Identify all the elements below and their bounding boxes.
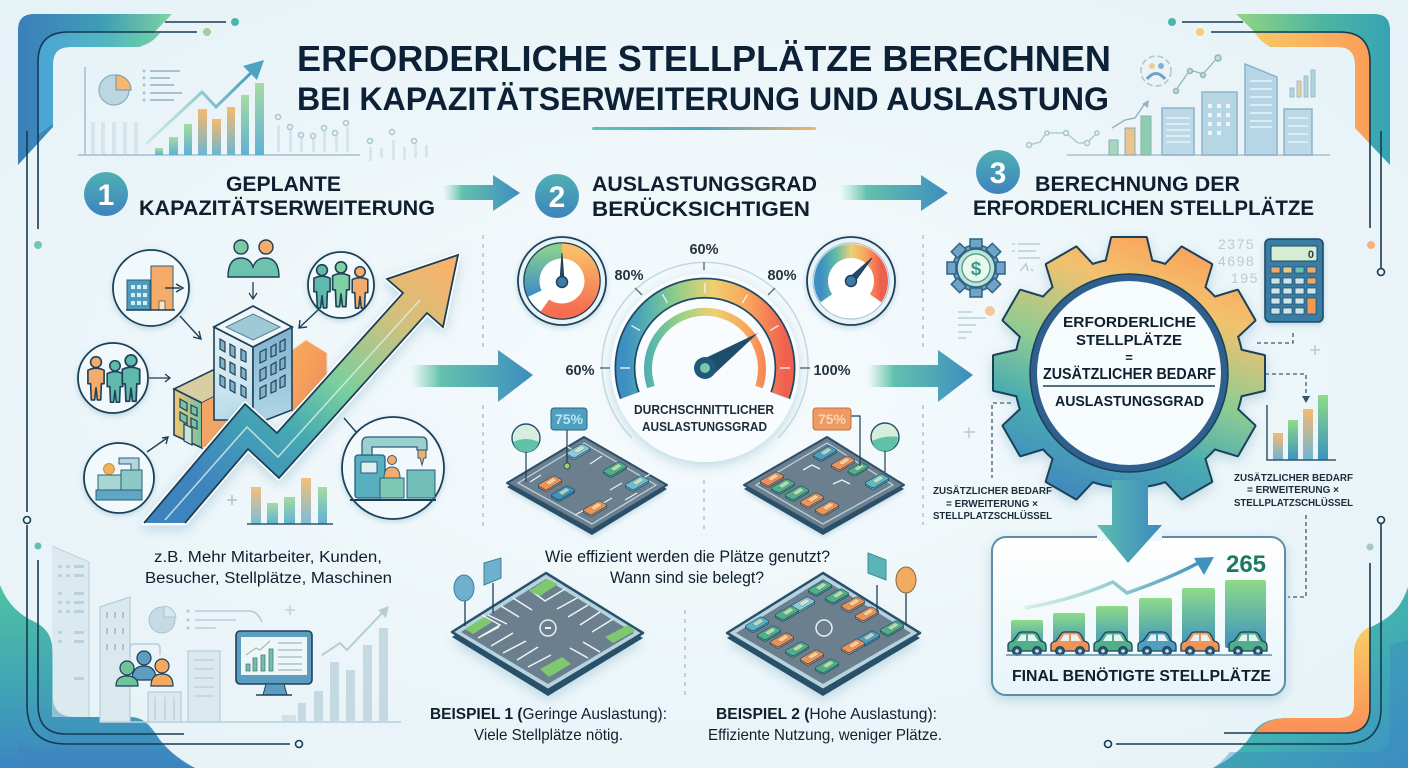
small gauge left [518,237,606,325]
bottom left illustration [52,546,401,722]
step 1 illustration [78,240,458,524]
result panel: FINAL BENÖTIGTE STELLPLÄTZE [1012,668,1271,685]
icon: cost gear: $ [971,259,982,280]
gauge caption: DURCHSCHNITTLICHER [634,403,774,417]
formula text: STELLPLÄTZE [1076,332,1182,349]
number badge 3: 3 [990,157,1006,190]
formula text: ZUSÄTZLICHER BEDARF [1043,366,1216,383]
small bar chart [227,478,333,524]
title [297,38,1111,130]
additional demand note: left: = ERWEITERUNG × [946,499,1038,510]
icon: machine with worker [342,417,444,519]
gauge scale labels: 100% [813,363,851,379]
additional demand note: right: ZUSÄTZLICHER BEDARF [1234,471,1353,484]
75% tag [551,408,587,463]
title: BEI KAPAZITÄTSERWEITERUNG UND AUSLASTUNG [297,81,1109,117]
result value: 265 [1226,551,1266,578]
monitor icon [236,631,312,695]
number badge 2: 2 [549,181,565,214]
additional demand note: right [1234,471,1353,509]
icon: group of people [308,252,374,318]
icon: handshake people [228,240,279,299]
step 2 heading: AUSLASTUNGSGRAD [592,173,817,196]
gauge scale labels: 60% [565,363,595,379]
additional demand note: left: STELLPLATZSCHLÜSSEL [933,509,1052,522]
header city illustration: right [1026,55,1330,155]
signposts [454,558,501,626]
small parking lot right [744,408,904,535]
arrow: gear to result [1097,480,1162,563]
result trend arrow [1025,557,1214,608]
mini bar chart [1267,395,1336,460]
arrow: step 1 illustration to gauge [410,350,533,402]
decorative notes near cost gear [958,244,1040,338]
orange building behind [292,340,327,435]
calculator digits: 2375 [1218,236,1255,252]
centre question: Wann sind sie belegt? [610,569,764,587]
number badge 2 [535,174,579,218]
step 1 heading: KAPAZITÄTSERWEITERUNG [139,197,435,220]
centre question: Wie effizient werden die Plätze genutzt? [545,548,830,566]
centre question [545,548,830,587]
people group icon [116,644,173,686]
result panel [992,480,1285,695]
large parking lot: example 1 [452,558,643,696]
calculator digits: 4698 [1218,253,1255,269]
example 2 caption [708,706,942,744]
corner frame: bottom right [1104,516,1408,768]
number badge 1: 1 [98,179,114,212]
section dividers [483,235,923,695]
additional demand note: left: ZUSÄTZLICHER BEDARF [933,484,1052,497]
arrow: step 1 to step 2 [443,175,520,211]
connector arrows [180,310,318,339]
step 3 heading: BERECHNUNG DER [1035,173,1240,196]
formula text: ERFORDERLICHE [1063,314,1196,331]
header chart illustration: left [78,60,428,161]
signposts [868,553,916,625]
step 1 heading [84,172,435,220]
calculator digits: 195 [1231,270,1259,286]
example captions [430,706,942,744]
additional demand note: right: = ERWEITERUNG × [1247,485,1339,496]
75% tag: 75% [555,411,584,427]
step 1 description: z.B. Mehr Mitarbeiter, Kunden, [154,549,382,566]
main utilisation gauge [565,242,851,462]
icon: calculator: 0 [1308,249,1314,261]
example 1 caption [430,706,667,744]
marker pin [512,424,540,482]
step 2 heading: BERÜCKSICHTIGEN [592,198,810,221]
icon: office desk [84,437,168,513]
car row [1006,632,1272,656]
75% tag [813,408,860,466]
small parking lot left [507,408,667,535]
example 2 caption: Effiziente Nutzung, weniger Plätze. [708,727,942,744]
step 1 heading: GEPLANTE [226,173,341,196]
corner frame: top right [1168,14,1390,276]
gauge scale labels: 80% [767,268,797,284]
formula gear [986,234,1272,508]
dashed connectors [992,330,1306,597]
gauge scale labels [565,242,851,379]
step 2 heading [535,173,817,221]
small building [174,370,240,448]
example 2 caption: BEISPIEL 2 (Hohe Auslastung): [716,706,937,723]
formula text [1043,314,1216,410]
step 3 heading [973,150,1314,220]
gauge scale labels: 80% [614,268,644,284]
calculator digits [1218,236,1259,286]
large parking lot: example 2 [727,553,920,696]
formula text: AUSLASTUNGSGRAD [1055,393,1204,410]
marker pin [871,423,899,472]
icon: buildings expansion [113,250,189,326]
corner frame: top left [18,14,239,512]
number badge 1 [84,172,128,216]
result bars [1011,580,1266,648]
growth arrow [144,255,458,523]
icon: walking people [78,343,170,413]
step 1 description [145,549,392,587]
icon: calculator [1265,239,1323,322]
additional demand note: right: STELLPLATZSCHLÜSSEL [1234,496,1353,509]
corner frame: bottom left [0,516,302,768]
arrow: step 2 to step 3 [840,175,948,211]
step 1 description: Besucher, Stellplätze, Maschinen [145,570,392,587]
additional demand note: left [933,484,1052,522]
number badge 3 [976,150,1020,194]
gauge scale labels: 60% [689,242,719,258]
gauge caption: AUSLASTUNGSGRAD [642,420,767,434]
arrow: gauge to formula [867,350,973,402]
formula text: = [1125,350,1133,365]
75% tag: 75% [818,411,847,427]
small gauge right [807,237,895,325]
gauge caption [634,403,774,434]
step 3 heading: ERFORDERLICHEN STELLPLÄTZE [973,197,1314,220]
example 1 caption: BEISPIEL 1 (Geringe Auslastung): [430,706,667,723]
title: ERFORDERLICHE STELLPLÄTZE BERECHNEN [297,38,1111,79]
icon: cost gear [947,239,1005,297]
example 1 caption: Viele Stellplätze nötig. [474,727,623,744]
main building [214,306,292,425]
